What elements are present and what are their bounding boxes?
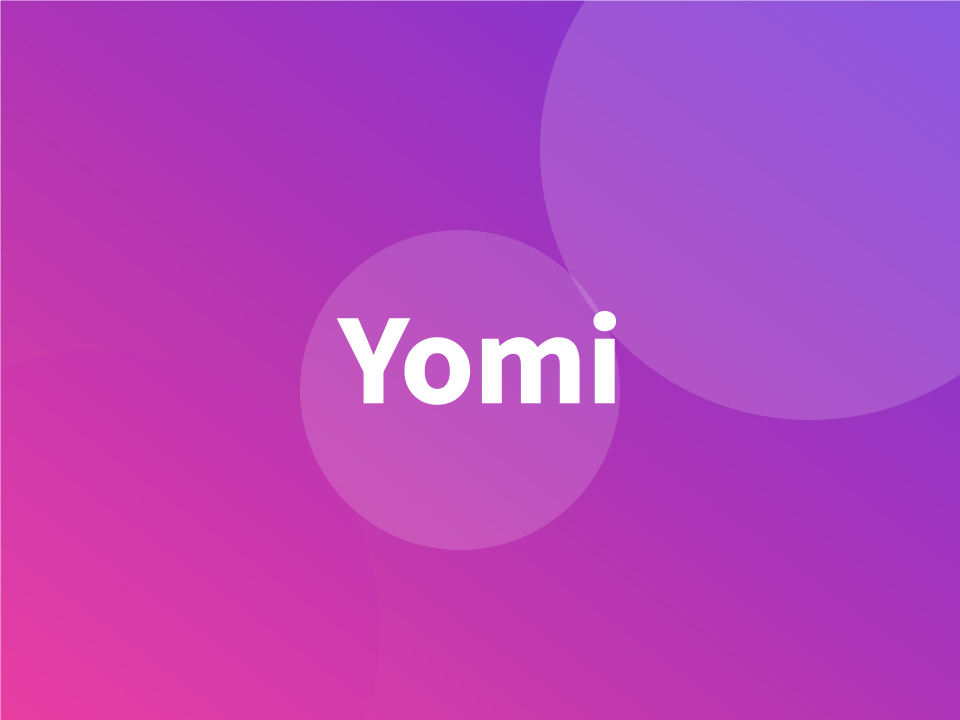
top edge highlight: [0, 0, 960, 1]
decorative circle: bottom left: [0, 350, 380, 720]
decorative circle: centre: [300, 230, 620, 550]
title: Yomi: [338, 273, 622, 434]
left edge highlight: [0, 0, 1, 720]
decorative circle: top right: [540, 0, 960, 420]
